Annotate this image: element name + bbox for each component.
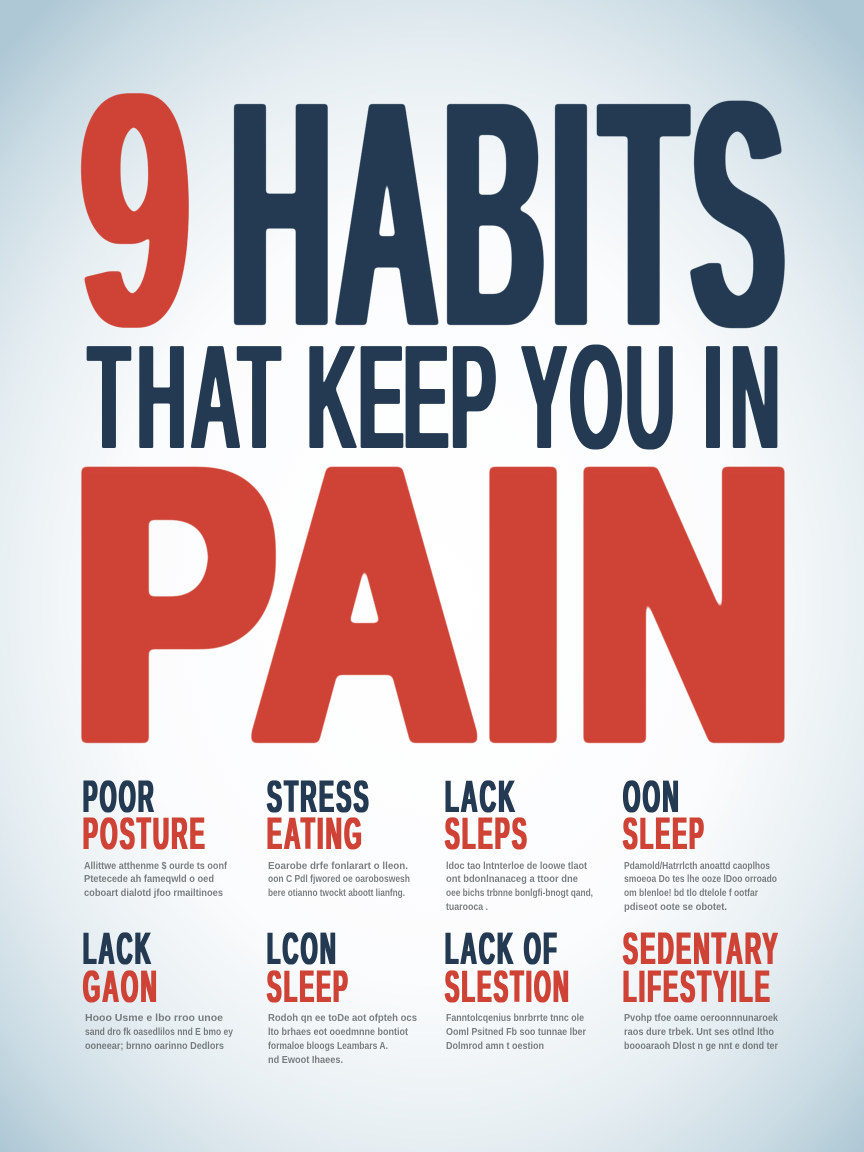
habit: lcon sleep: SLEEP xyxy=(267,961,350,1012)
habit: lack sleps: LACK xyxy=(445,771,517,822)
habit: oon sleep xyxy=(623,771,777,913)
habit: oon sleep: OON xyxy=(623,771,681,822)
title word: habits: HABITS xyxy=(231,33,784,397)
habit: poor posture: POSTURE xyxy=(83,808,207,859)
habit: poor posture xyxy=(83,771,227,899)
title number: 9: 9 xyxy=(80,22,190,398)
title line: that keep you in: THAT KEEP YOU IN xyxy=(88,313,780,481)
description: Dolmrod amn t oestion xyxy=(446,1040,544,1052)
description: raos dure trbek. Unt ses otlnd ltho xyxy=(624,1026,774,1038)
description: tuarooca . xyxy=(446,901,488,913)
description: Ooml Psitned Fb soo tunnae lber xyxy=(446,1026,586,1038)
description: ooneear; brnno oarinno Dedlors xyxy=(85,1040,224,1052)
description: om blenloe! bd tlo dtelole f ootfar xyxy=(624,887,758,899)
description: oee bichs trbnne bonlgfi-bnogt qand, xyxy=(446,887,593,899)
habit: lack sleps: SLEPS xyxy=(445,808,529,859)
description: Hooo Usme e lbo rroo unoe xyxy=(85,1012,223,1024)
description: lto brhaes eot ooedmnne bontiot xyxy=(268,1026,408,1038)
description: smoeoa Do tes lhe ooze lDoo orroado xyxy=(624,873,777,885)
description: Pvohp tfoe oame oeroonnnunaroek xyxy=(624,1012,778,1024)
description: pdiseot oote se obotet. xyxy=(624,901,727,913)
description: oon C Pdl fjwored oe oaroboswesh xyxy=(268,873,410,885)
description: Pdamold/Hatrrlcth anoattd caoplhos xyxy=(624,860,770,872)
habit: lack of slestion: LACK OF xyxy=(445,923,559,974)
title word: pain: PAIN xyxy=(73,389,793,821)
description: bere otianno twockt aboott lianfng. xyxy=(268,887,405,899)
description: coboart dialotd jfoo rmailtinoes xyxy=(84,887,223,899)
habit: lack gaon: GAON xyxy=(83,961,159,1012)
description: Allittwe atthenme $ ourde ts oonf xyxy=(84,860,227,872)
description: sand dro fk oasedlilos nnd E bmo ey xyxy=(85,1026,233,1038)
description: boooaraoh Dlost n ge nnt e dond ter xyxy=(624,1040,778,1052)
habit: sedentary lifestyile xyxy=(623,923,780,1052)
description: Eoarobe drfe fonlarart o lleon. xyxy=(268,860,408,872)
habit: lack gaon xyxy=(83,923,233,1052)
habit: stress eating: EATING xyxy=(267,808,364,859)
habit: lack of slestion xyxy=(445,923,586,1052)
description: Ptetecede ah fameqwld o oed xyxy=(84,873,214,885)
habit: stress eating xyxy=(267,771,410,899)
habit: stress eating: STRESS xyxy=(267,771,371,822)
habit: poor posture: POOR xyxy=(83,771,156,822)
habit: lack gaon: LACK xyxy=(83,923,153,974)
habit: lcon sleep xyxy=(267,923,417,1066)
habit: lack of slestion: SLESTION xyxy=(445,961,571,1012)
habit: lcon sleep: LCON xyxy=(267,923,338,974)
description: Fanntolcqenius bnrbrrte tnnc ole xyxy=(446,1012,584,1024)
description: nd Ewoot Ihaees. xyxy=(268,1054,343,1066)
description: ont bdonlnanaceg a ttoor dne xyxy=(446,873,578,885)
habit: oon sleep: SLEEP xyxy=(623,808,706,859)
habit: lack sleps xyxy=(445,771,593,913)
description: ldoc tao lntnterloe de loowe tlaot xyxy=(446,860,587,872)
description: formaloe bloogs Leambars A. xyxy=(268,1040,388,1052)
title xyxy=(73,22,793,821)
description: Rodoh qn ee toDe aot ofpteh ocs xyxy=(268,1012,417,1024)
